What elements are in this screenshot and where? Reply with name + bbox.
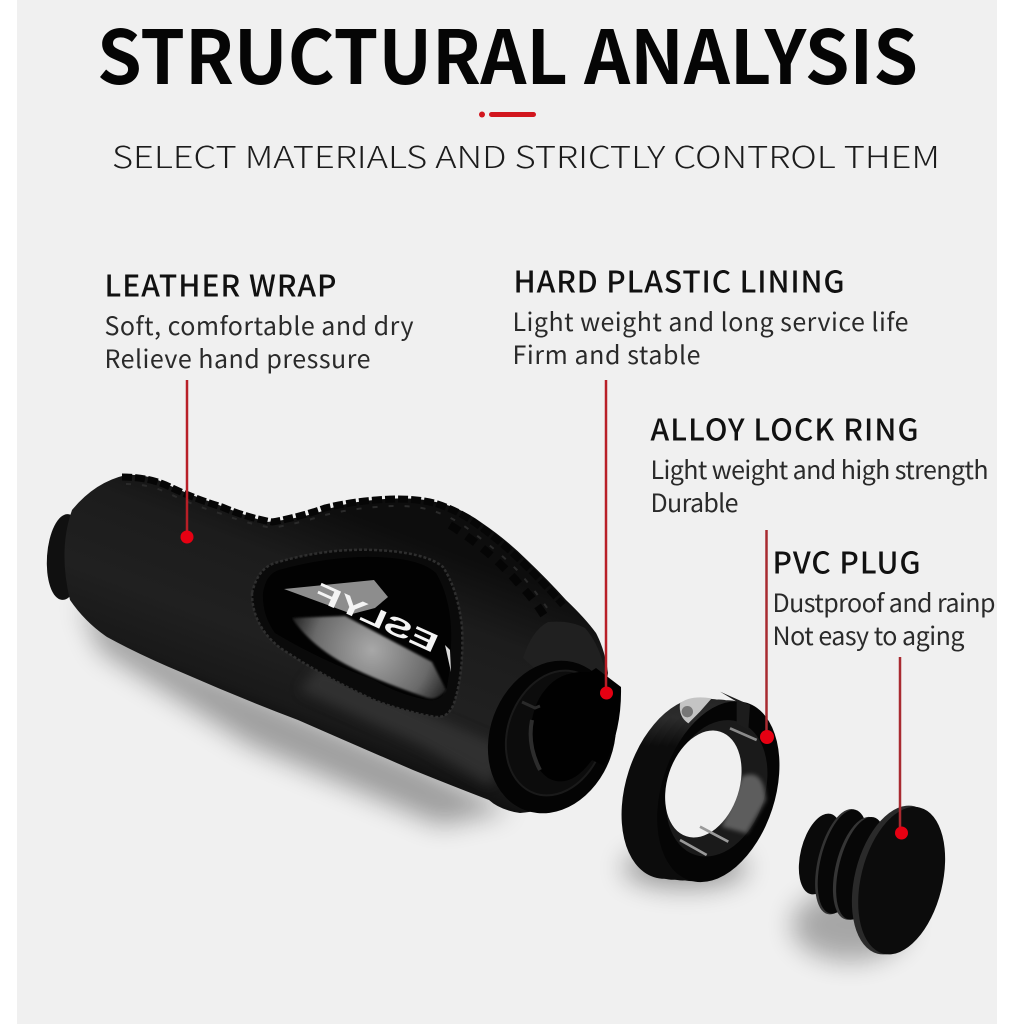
callout line: pvc plug bbox=[895, 657, 908, 840]
inner band bbox=[649, 707, 784, 870]
label: hard plastic lining: HARD PLASTIC LINING bbox=[514, 258, 844, 302]
ring side wall bbox=[600, 682, 792, 897]
label: leather wrap: Soft, comfortable and dry bbox=[104, 307, 414, 343]
label: pvc plug: Dustproof and rainp bbox=[772, 584, 996, 620]
label: leather wrap: Relieve hand pressure bbox=[104, 340, 370, 376]
flange face bbox=[844, 798, 959, 964]
lining highlight bbox=[531, 720, 540, 770]
label: alloy lock ring: ALLOY LOCK RING bbox=[650, 406, 918, 450]
clamp notch bbox=[720, 692, 750, 730]
label: alloy lock ring: Durable bbox=[650, 484, 738, 520]
alloy lock ring bbox=[600, 682, 801, 898]
hole bbox=[652, 721, 755, 847]
label: alloy lock ring: Light weight and high strength bbox=[650, 451, 988, 487]
grip: end opening with hard plastic lining bbox=[467, 622, 637, 832]
top stitching lumps bbox=[122, 477, 563, 605]
inner teeth bbox=[680, 827, 728, 855]
ribs bbox=[791, 809, 850, 899]
bolt bbox=[680, 697, 712, 723]
collar bbox=[467, 642, 637, 832]
soft shadows under parts bbox=[80, 600, 908, 961]
label: pvc plug: PVC PLUG bbox=[772, 538, 920, 582]
label: leather wrap: LEATHER WRAP bbox=[104, 262, 336, 306]
subtitle: SELECT MATERIALS AND STRICTLY CONTROL THEM bbox=[112, 133, 940, 177]
leather sheen bbox=[300, 665, 510, 785]
gloss highlight upper bbox=[284, 580, 388, 614]
gloss highlight lower bbox=[292, 616, 446, 698]
inner band sheen bbox=[722, 774, 766, 833]
leather wrap bbox=[64, 475, 608, 813]
label: hard plastic lining: Firm and stable bbox=[512, 336, 700, 372]
grip: logo badge bbox=[252, 550, 462, 717]
inner stitch shadows bbox=[450, 525, 548, 622]
lining tube opening bbox=[530, 668, 621, 781]
pvc plug bbox=[791, 796, 959, 964]
label: alloy lock ring bbox=[650, 406, 988, 520]
leather flap bbox=[523, 622, 606, 700]
brand text mirrored: ESLYF bbox=[310, 577, 443, 658]
red accent dash bbox=[479, 112, 536, 118]
glossy insert bbox=[263, 557, 451, 700]
label: hard plastic lining: Light weight and long service life bbox=[512, 303, 908, 339]
label: pvc plug: Not easy to aging bbox=[772, 617, 964, 653]
callout line: leather wrap bbox=[180, 380, 194, 544]
stitch highlights bbox=[126, 484, 552, 615]
badge stitched border bbox=[252, 550, 462, 717]
label: hard plastic lining bbox=[512, 258, 908, 372]
label: pvc plug bbox=[775, 551, 994, 652]
grip: leather body bbox=[44, 475, 608, 813]
front face bbox=[636, 685, 801, 898]
label: leather wrap bbox=[104, 262, 414, 376]
flange rim bbox=[838, 796, 954, 964]
callout line: alloy lock ring bbox=[760, 530, 774, 744]
title: STRUCTURAL ANALYSIS bbox=[97, 0, 918, 106]
callout line: hard plastic lining bbox=[600, 380, 613, 700]
left end cap bbox=[44, 513, 86, 601]
badge edge glint bbox=[445, 645, 451, 672]
